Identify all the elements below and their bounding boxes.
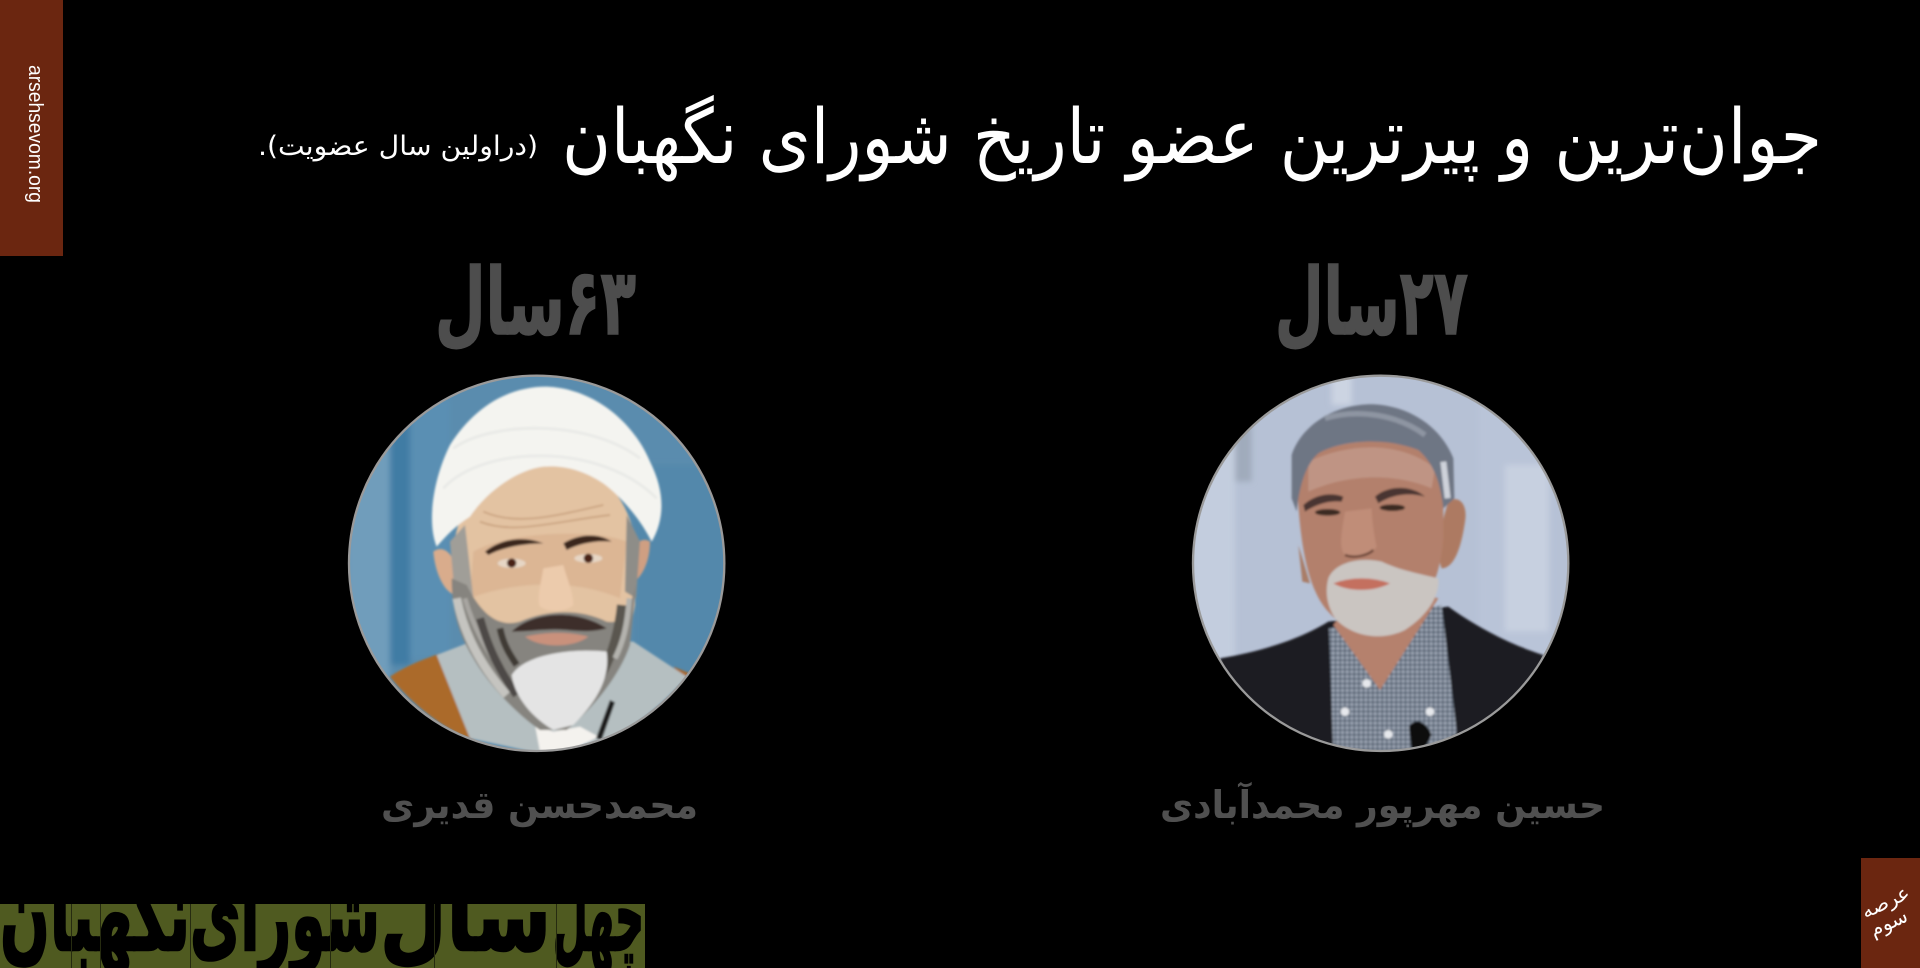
beard: [452, 578, 636, 730]
moustache: [512, 615, 607, 632]
neck: [1332, 596, 1439, 690]
ear: [1439, 499, 1466, 568]
turban: [432, 387, 661, 547]
website address: arsehsevom.org: [24, 65, 46, 203]
eyebrows: [1303, 494, 1343, 512]
series banner: [0, 904, 645, 968]
logo calligraphy: سوم: [1865, 903, 1911, 942]
shirt: [1329, 605, 1457, 755]
name: oldest member: محمدحسن قدیری: [381, 783, 698, 827]
hair: [1292, 404, 1454, 512]
subtitle note: (دراولین سال عضویت).: [258, 131, 538, 162]
portrait: oldest member: [347, 375, 727, 753]
eyes: [498, 559, 526, 568]
face: [454, 464, 636, 625]
nose: [1341, 508, 1377, 557]
logo calligraphy: [1857, 880, 1920, 942]
robe: [390, 653, 473, 740]
ears: [433, 549, 455, 595]
logo calligraphy: عرصه: [1857, 880, 1913, 923]
name: youngest member: حسین مهرپور محمدآبادی: [1160, 781, 1605, 827]
jacket: [1220, 607, 1543, 765]
mic: [1409, 721, 1432, 752]
forehead shading: [483, 505, 603, 519]
face: [1297, 441, 1443, 633]
hair: [450, 525, 473, 598]
age: youngest member: ۲۷سال: [1275, 249, 1468, 356]
nose: [540, 565, 572, 610]
side tab: website: [0, 0, 63, 256]
eyes: [1315, 509, 1340, 516]
age: oldest member: ۶۳سال: [435, 249, 636, 356]
portrait: youngest member: [1192, 375, 1568, 765]
logo tab: [1857, 858, 1920, 968]
eyebrows: [485, 539, 543, 555]
beard: [1327, 560, 1438, 636]
banner title: [2, 904, 641, 968]
